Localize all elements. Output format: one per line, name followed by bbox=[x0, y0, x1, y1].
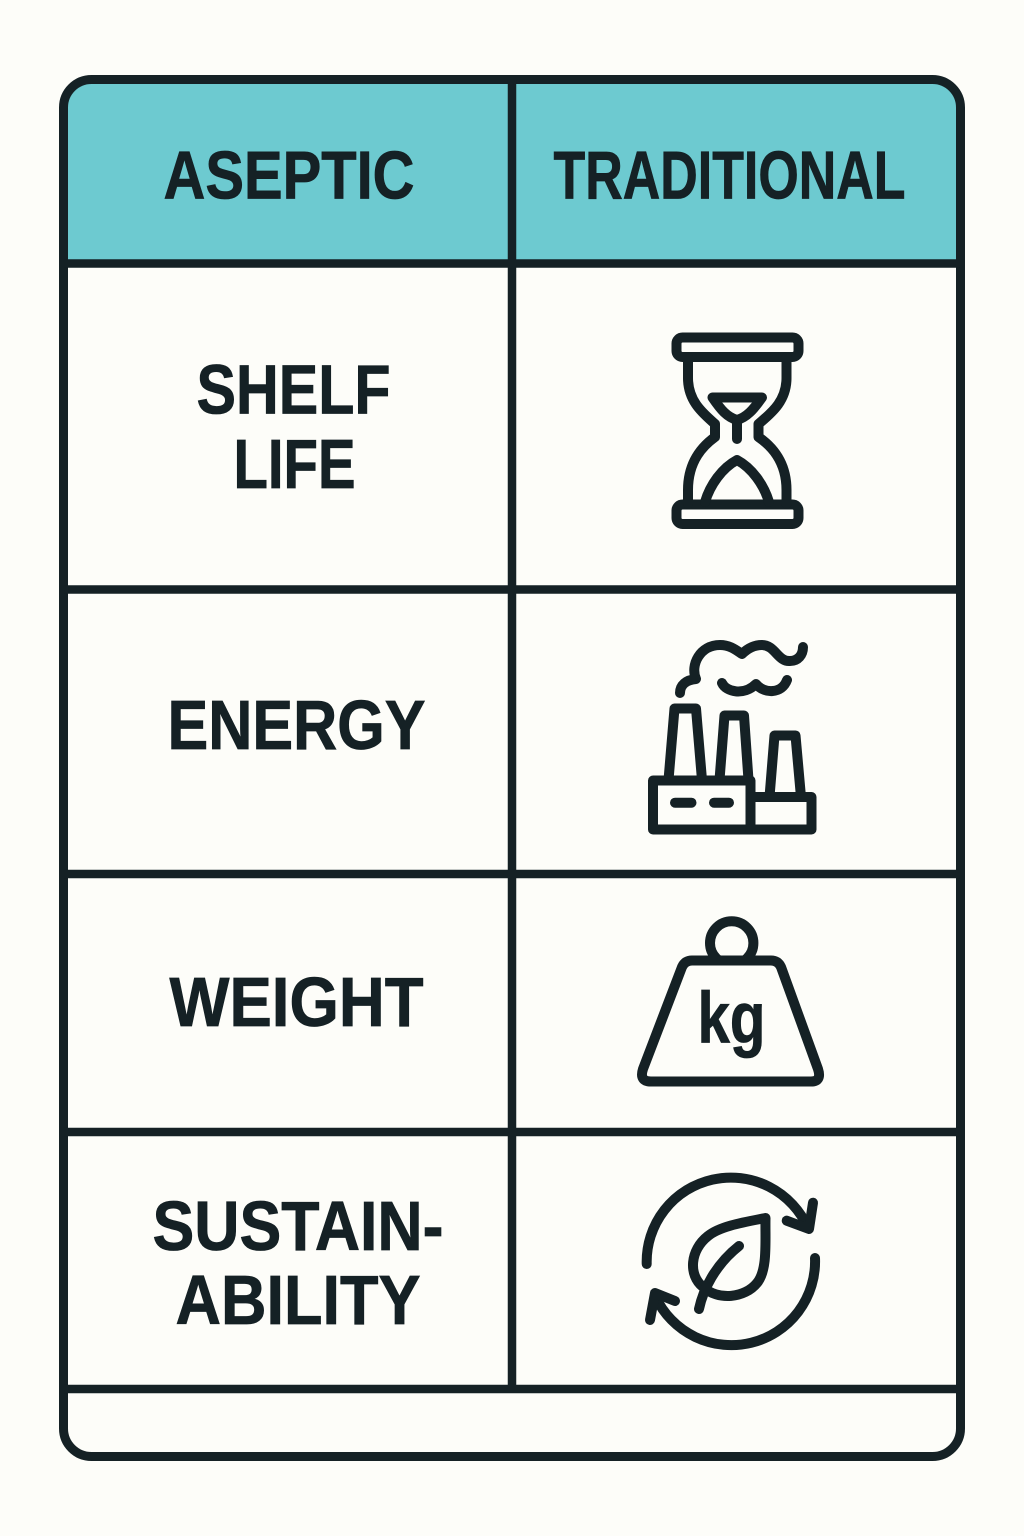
row label: shelf life: LIFE bbox=[234, 425, 356, 503]
panel: table header band bbox=[64, 79, 960, 263]
row label: sustainability: SUSTAIN- bbox=[152, 1187, 444, 1265]
icon: hourglass bbox=[676, 338, 798, 524]
row label: shelf life: SHELF bbox=[196, 350, 390, 428]
row label: sustainability: ABILITY bbox=[176, 1261, 420, 1339]
heading: traditional: TRADITIONAL bbox=[554, 138, 906, 214]
icon: factory with smoke bbox=[653, 645, 812, 830]
icon: recycling arrows with leaf bbox=[647, 1178, 815, 1345]
icon: kg weight: kg bbox=[698, 979, 766, 1059]
icon: kg weight bbox=[642, 921, 819, 1082]
row label: shelf life bbox=[196, 350, 390, 503]
panel: table frame and grid bbox=[64, 80, 960, 1456]
row label: energy: ENERGY bbox=[168, 686, 426, 764]
heading: aseptic: ASEPTIC bbox=[164, 138, 414, 214]
row label: weight: WEIGHT bbox=[170, 963, 424, 1041]
row label: sustainability bbox=[152, 1187, 444, 1339]
